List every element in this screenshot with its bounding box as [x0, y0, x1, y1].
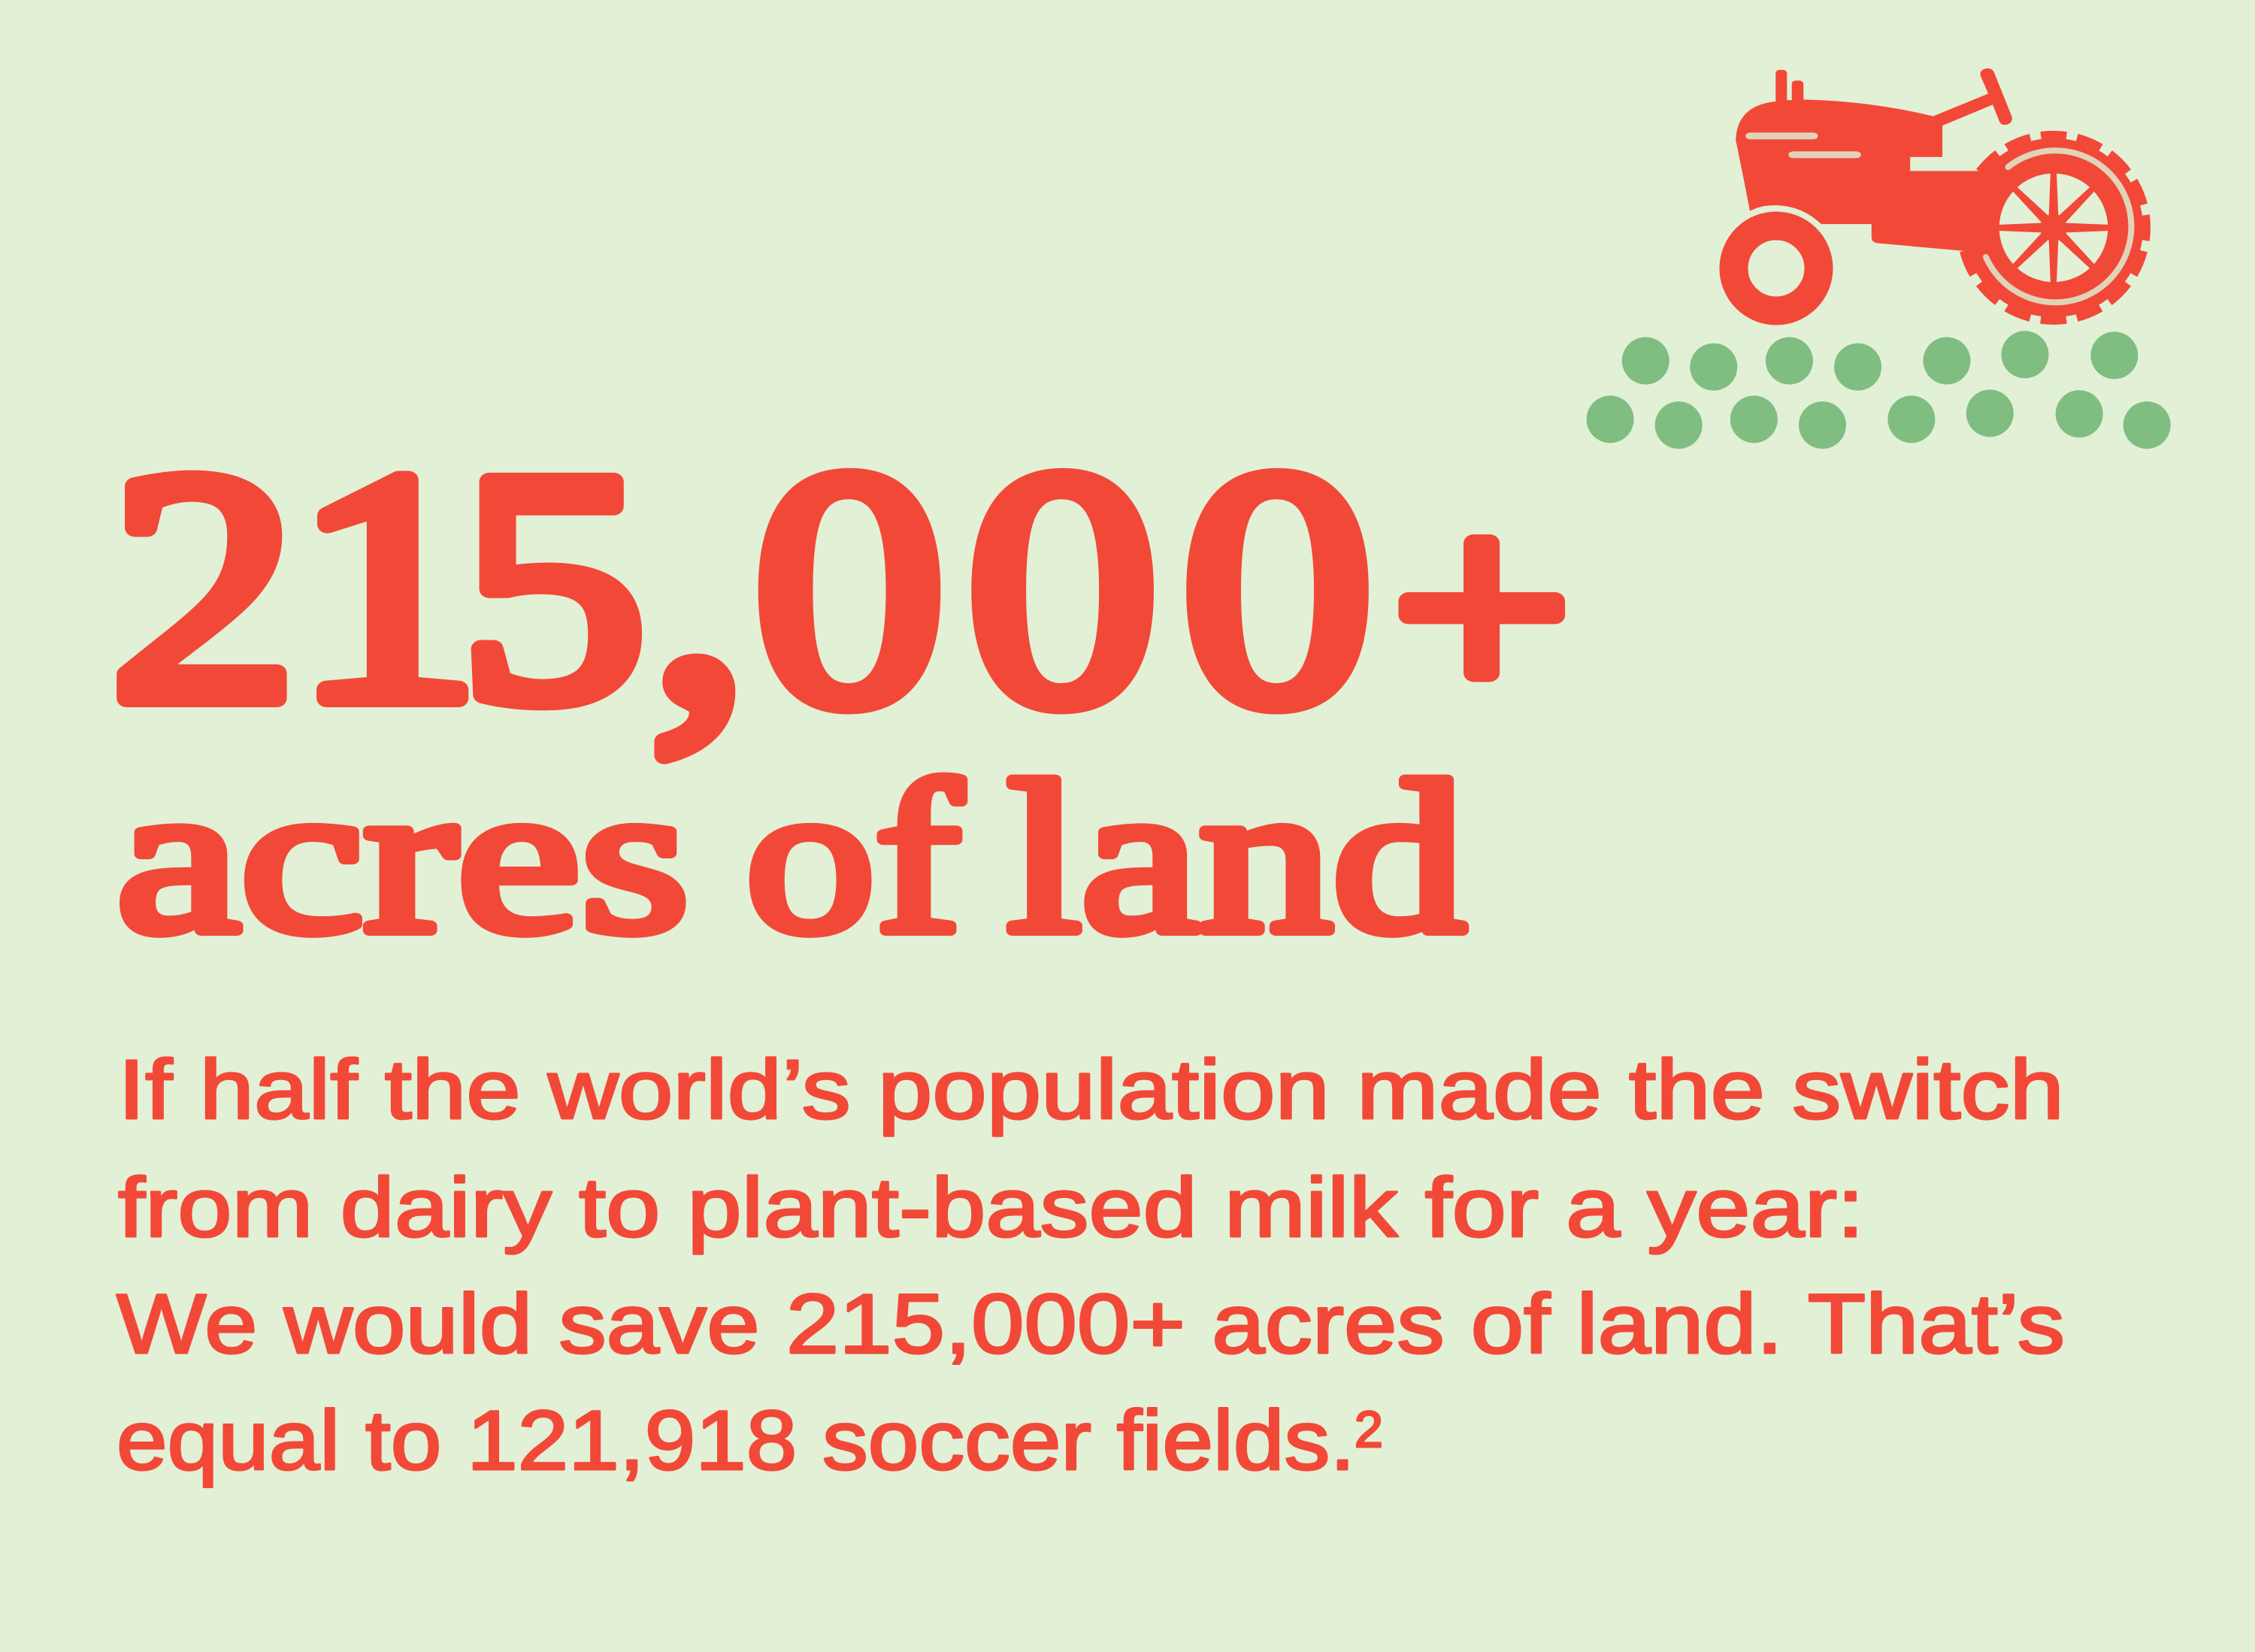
icon: tractor — [1733, 68, 2145, 320]
big number heading: 5 — [459, 404, 646, 770]
body text paragraph: equal to 121,918 soccer fields. — [117, 1393, 1355, 1487]
footnote superscript: 2 — [1355, 1401, 1383, 1458]
body text paragraph: We would save 215,000+ acres of land. That’s — [117, 1277, 2065, 1371]
subheading: land — [1007, 737, 1466, 978]
front wheel — [1733, 225, 1819, 311]
subheading — [117, 737, 1466, 978]
big number heading: 0 — [1182, 401, 1373, 775]
big number heading: + — [1393, 453, 1570, 761]
big number heading: 0 — [754, 401, 945, 775]
big number heading: , — [649, 379, 751, 778]
subheading: of — [746, 737, 964, 978]
big number heading: 0 — [967, 401, 1158, 775]
icon: rows of green crop dots — [1587, 331, 2171, 449]
big number heading: 2 — [110, 404, 298, 770]
body text paragraph: If half the world’s population made the switch — [118, 1042, 2064, 1136]
body text paragraph — [117, 1042, 2065, 1487]
body text paragraph: from dairy to plant-based milk for a year: — [118, 1160, 1864, 1254]
subheading: acres — [117, 737, 689, 978]
rear wheel — [1962, 135, 2145, 320]
big number heading: 1 — [294, 404, 481, 770]
tractor body — [1736, 68, 2012, 252]
